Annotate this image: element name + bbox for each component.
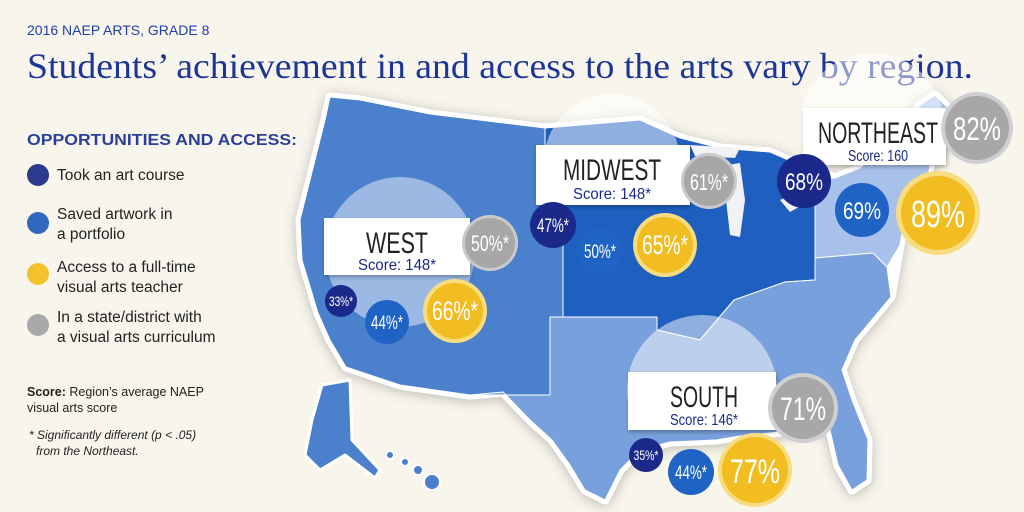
legend item: took art course: Took an art course (57, 167, 185, 184)
score note: Score: Region’s average NAEP (27, 385, 204, 399)
region label: south (626, 315, 780, 434)
circles: midwest: 61%* (690, 169, 728, 195)
legend (27, 132, 297, 346)
great lakes (690, 145, 820, 237)
region label: midwest: Score: 148* (573, 186, 651, 203)
region label: west: WEST (366, 227, 428, 260)
region label: northeast: NORTHEAST (818, 117, 938, 150)
region label: midwest: MIDWEST (563, 154, 661, 187)
circles: midwest (530, 153, 737, 277)
legend item: portfolio: Saved artwork in (57, 206, 172, 223)
circles: west: 66%* (432, 296, 478, 326)
region: south (470, 253, 891, 500)
subtitle: 2016 NAEP ARTS, GRADE 8 (27, 22, 210, 38)
score note (27, 385, 204, 415)
region label: northeast (802, 53, 950, 170)
legend item: curriculum: In a state/district with (57, 309, 202, 326)
region label: west (324, 177, 475, 327)
region: northeast (815, 95, 952, 267)
hawaii (386, 451, 440, 490)
circles: west: 33%* (329, 293, 353, 309)
circles: west: 44%* (371, 313, 403, 334)
alaska (305, 380, 380, 478)
circles: midwest: 47%* (537, 216, 569, 237)
region label: south: Score: 146* (670, 412, 738, 429)
circles: south: 71% (780, 391, 826, 427)
legend item: portfolio: a portfolio (57, 226, 125, 243)
circles: south: 44%* (675, 463, 707, 484)
region: west (300, 97, 563, 395)
circles: south: 77% (730, 453, 780, 491)
circles: northeast: 89% (911, 194, 965, 236)
footnote: from the Northeast. (36, 444, 139, 458)
circles: west: 50%* (471, 231, 509, 256)
circles: midwest: 50%* (584, 242, 616, 263)
map (300, 95, 952, 500)
circles: northeast: 68% (785, 169, 823, 196)
region label: midwest (534, 94, 694, 209)
legend heading: OPPORTUNITIES AND ACCESS: (27, 132, 297, 149)
legend item: took art course (27, 164, 185, 186)
map outline shadow (300, 95, 952, 500)
legend item: teacher: visual arts teacher (57, 279, 183, 296)
legend item: curriculum (27, 309, 216, 346)
circles: northeast (777, 92, 1013, 255)
legend item: teacher: Access to a full-time (57, 259, 196, 276)
circles: south: 35%* (634, 447, 659, 463)
region label: south: SOUTH (670, 381, 738, 414)
region: midwest (545, 120, 815, 340)
circles: northeast: 69% (843, 198, 881, 225)
region label: northeast: Score: 160 (848, 148, 908, 165)
score note: visual arts score (27, 401, 117, 415)
circles: northeast: 82% (953, 111, 1001, 147)
circles: midwest: 65%* (642, 230, 688, 260)
legend item: portfolio (27, 206, 172, 243)
footnote (29, 428, 196, 458)
footnote: * Significantly different (p < .05) (29, 428, 196, 442)
circles: south (629, 373, 838, 507)
legend item: curriculum: a visual arts curriculum (57, 329, 216, 346)
legend item: teacher (27, 259, 196, 296)
circles: west (325, 215, 518, 344)
title: Students’ achievement in and access to the arts vary by region. (27, 46, 973, 86)
region label: west: Score: 148* (358, 257, 436, 274)
